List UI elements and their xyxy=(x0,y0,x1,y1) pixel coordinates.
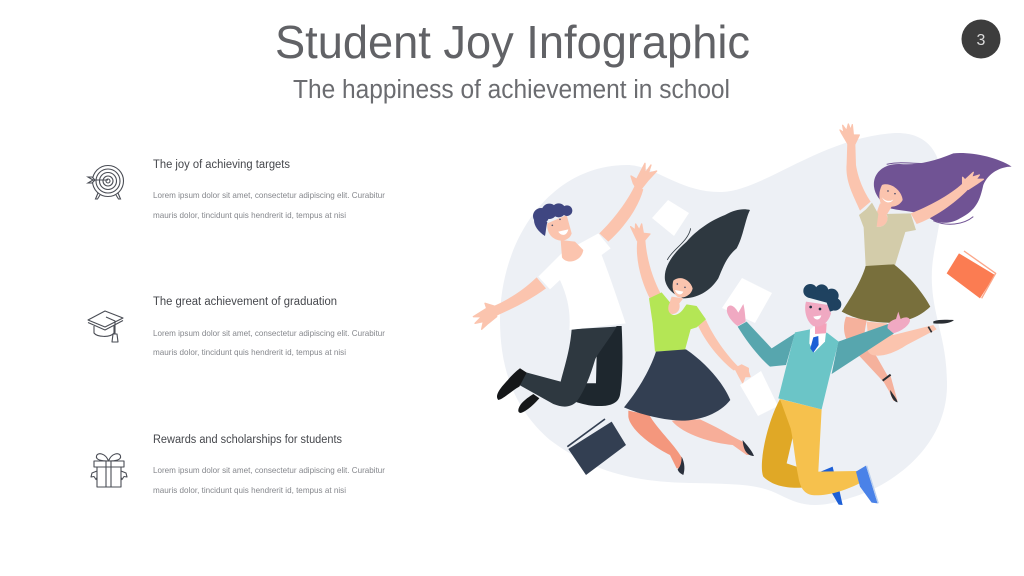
body text: Lorem ipsum dolor sit amet, consectetur adipiscing elit. Curabitur xyxy=(153,328,385,338)
icon: gift box xyxy=(91,454,127,487)
left hand xyxy=(727,304,746,326)
side arm xyxy=(911,183,968,224)
neck xyxy=(561,240,583,261)
raised arm xyxy=(599,185,643,242)
front pants leg xyxy=(519,327,617,407)
illustration: jumping students xyxy=(473,124,1012,505)
body text: Lorem ipsum dolor sit amet, consectetur adipiscing elit. Curabitur xyxy=(153,190,385,200)
shirt xyxy=(538,233,626,330)
page number badge: 3 xyxy=(977,32,986,49)
shirt collar xyxy=(809,327,826,353)
dark trouser leg xyxy=(762,399,802,488)
shoe xyxy=(933,320,954,324)
hair xyxy=(665,209,750,298)
title: Student Joy Infographic xyxy=(275,16,750,68)
hair xyxy=(874,153,1012,223)
hair xyxy=(533,203,572,236)
dark book xyxy=(567,419,626,475)
hair xyxy=(803,284,841,312)
body text: mauris dolor, tincidunt quis hendrerit id, tempus at nisi xyxy=(153,210,346,220)
front shoe xyxy=(497,368,527,400)
page number badge xyxy=(962,20,1000,58)
side arm xyxy=(491,277,546,316)
orange book xyxy=(947,251,996,298)
side arm xyxy=(697,320,738,371)
background blob xyxy=(500,133,947,505)
back pants leg xyxy=(575,326,622,406)
far leg xyxy=(672,419,752,455)
character: man in teal sweater xyxy=(727,304,894,505)
neck xyxy=(815,323,827,334)
back shoe xyxy=(518,394,539,413)
heading: Rewards and scholarships for students xyxy=(153,434,342,446)
body text: mauris dolor, tincidunt quis hendrerit id, tempus at nisi xyxy=(153,485,346,495)
character: woman in olive skirt xyxy=(840,124,1012,382)
item 1: joy of achieving targets xyxy=(88,159,385,220)
face xyxy=(805,302,831,327)
top xyxy=(649,292,706,352)
sweater xyxy=(778,329,839,409)
back leg xyxy=(844,317,890,382)
character: man in white t-shirt xyxy=(473,163,657,413)
lower foot xyxy=(882,375,898,402)
near shoe xyxy=(678,457,684,475)
skirt xyxy=(842,264,930,323)
body text: mauris dolor, tincidunt quis hendrerit id, tempus at nisi xyxy=(153,347,346,357)
right sleeve xyxy=(832,323,894,374)
top xyxy=(859,203,916,267)
heading: The great achievement of graduation xyxy=(153,296,337,308)
body text xyxy=(153,328,385,357)
character: woman in dark skirt xyxy=(631,209,750,383)
light trouser leg xyxy=(780,399,859,495)
neck and face xyxy=(667,297,683,314)
icon: graduation cap xyxy=(88,311,123,342)
far shoe xyxy=(743,440,754,456)
raised arm xyxy=(846,142,871,211)
heading: The joy of achieving targets xyxy=(153,159,290,171)
body text xyxy=(153,465,385,495)
icon: target with arrow xyxy=(88,166,124,199)
back shoes xyxy=(817,467,843,505)
item 2: great achievement of graduation xyxy=(88,296,385,357)
raised leg xyxy=(867,322,937,356)
neck and face xyxy=(876,203,892,227)
item 3: rewards and scholarships xyxy=(91,434,385,495)
near leg xyxy=(628,411,682,468)
paper sheets xyxy=(652,200,778,416)
body text: Lorem ipsum dolor sit amet, consectetur adipiscing elit. Curabitur xyxy=(153,465,385,475)
right hand xyxy=(888,312,910,333)
subtitle: The happiness of achievement in school xyxy=(293,76,730,104)
necktie xyxy=(810,336,819,353)
face xyxy=(547,215,572,241)
body text xyxy=(153,190,385,220)
skirt xyxy=(624,349,730,421)
raised arm xyxy=(637,239,661,300)
left sleeve xyxy=(738,322,795,367)
front shoe xyxy=(856,466,878,503)
